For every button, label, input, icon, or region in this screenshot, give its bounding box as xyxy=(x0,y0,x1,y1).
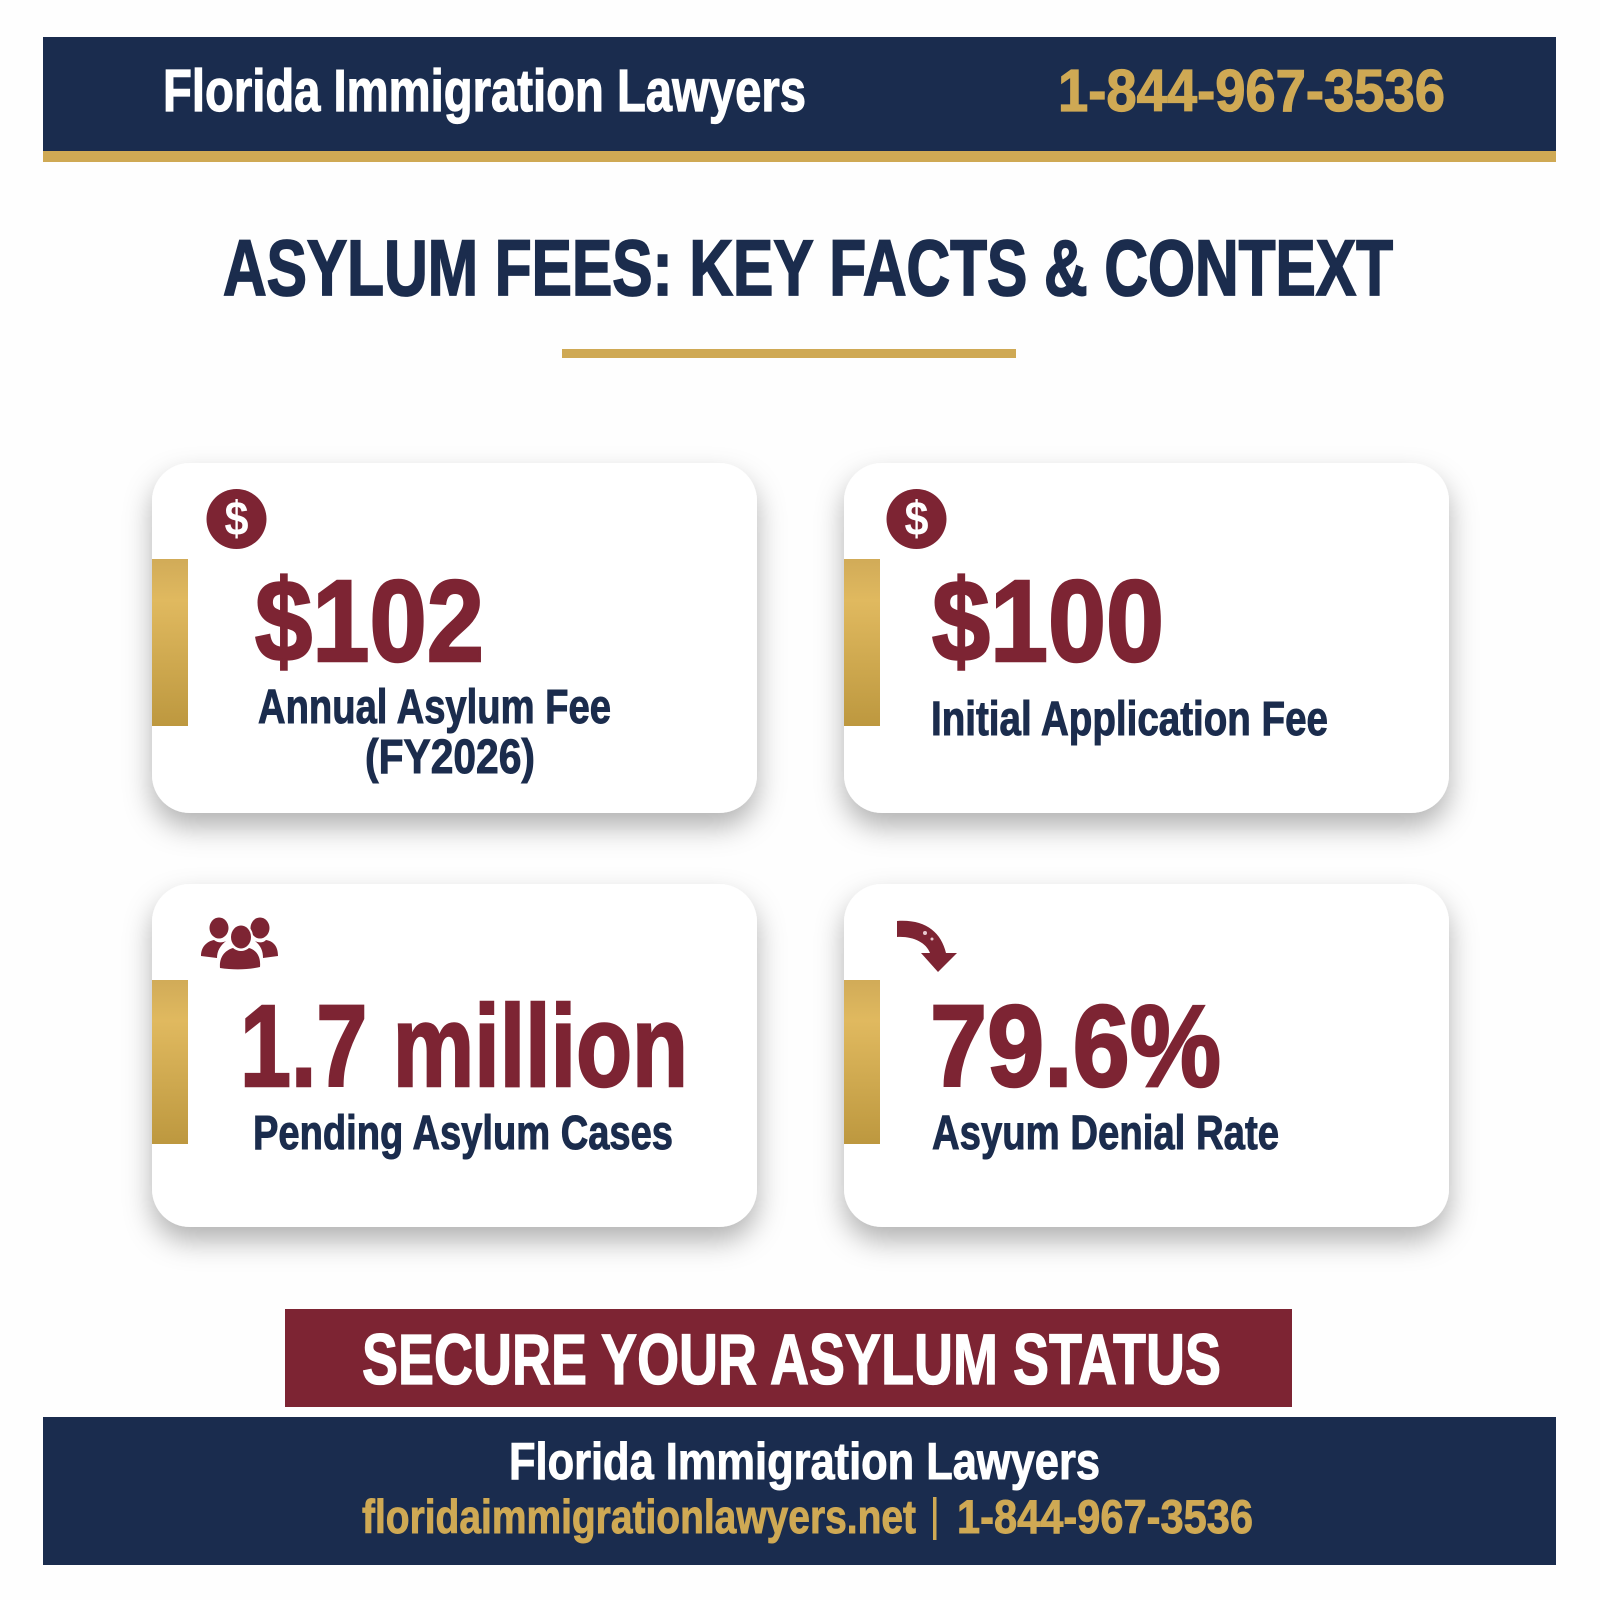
icon: downward curved arrow xyxy=(897,921,957,972)
phone number: 1-844-967-3536 xyxy=(1058,58,1445,124)
panel: annual asylum fee xyxy=(152,463,757,813)
label: annual asylum fee xyxy=(258,681,611,784)
stat: $100: $100 xyxy=(932,556,1164,686)
call to action banner xyxy=(285,1309,1292,1407)
title underline xyxy=(562,349,1016,358)
stat: 1.7 million: 1.7 million xyxy=(240,981,688,1111)
stat: 79.6%: 79.6% xyxy=(930,981,1221,1111)
icon: dollar coin xyxy=(886,489,946,549)
icon: dollar coin: $ xyxy=(904,493,929,546)
label: pending asylum cases: Pending Asylum Cases xyxy=(253,1107,673,1160)
footer banner xyxy=(43,1417,1556,1565)
header banner xyxy=(43,37,1556,162)
label: initial application fee: Initial Application Fee xyxy=(931,693,1328,746)
footer website and phone: 1-844-967-3536 xyxy=(957,1490,1253,1543)
firm name: Florida Immigration Lawyers xyxy=(163,58,806,124)
panel: asylum denial rate xyxy=(844,884,1449,1227)
panel: initial application fee xyxy=(844,463,1449,813)
icon: people group xyxy=(201,918,278,969)
call to action banner: SECURE YOUR ASYLUM STATUS xyxy=(362,1321,1221,1400)
footer firm name: Florida Immigration Lawyers xyxy=(509,1433,1100,1491)
panel: pending asylum cases xyxy=(152,884,757,1227)
label: annual asylum fee: Annual Asylum Fee xyxy=(258,681,611,734)
label: asylum denial rate: Asyum Denial Rate xyxy=(932,1107,1279,1160)
footer website and phone: floridaimmigrationlawyers.net xyxy=(362,1490,916,1543)
icon: dollar coin: $ xyxy=(224,493,249,546)
label: annual asylum fee: (FY2026) xyxy=(365,731,535,784)
stat: $102: $102 xyxy=(255,556,484,686)
icon: dollar coin xyxy=(206,489,266,549)
